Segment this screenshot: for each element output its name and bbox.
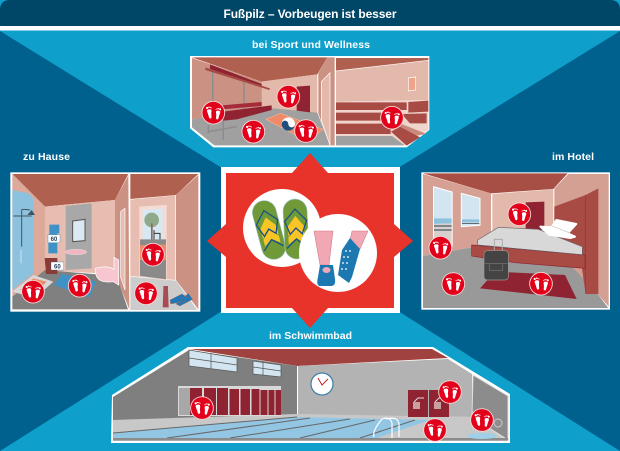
central panel: prevention <box>207 153 413 328</box>
heading: hotel: im Hotel <box>552 151 594 163</box>
panel: home <box>10 172 200 312</box>
laundry basket: 60 <box>54 264 61 270</box>
foot badges <box>190 380 494 442</box>
bath mat <box>54 274 96 297</box>
icon: flip flops <box>243 189 321 267</box>
towel <box>48 225 60 253</box>
header bar: Fußpilz – Vorbeugen ist besser <box>224 7 397 21</box>
foot badges <box>21 243 165 305</box>
foot badges <box>429 203 553 296</box>
panel: swimming pool <box>111 347 510 443</box>
suitcase <box>484 239 508 280</box>
panel: sport and wellness <box>190 56 429 147</box>
header bar <box>0 0 620 30</box>
bottle <box>163 286 169 307</box>
heading: home: zu Hause <box>23 151 70 163</box>
icon: grip socks <box>299 214 377 292</box>
pool ladder <box>374 418 399 438</box>
drain and puddle <box>467 419 502 439</box>
bed <box>472 220 585 268</box>
towel: 60 <box>51 237 58 243</box>
windows <box>189 350 281 377</box>
clock <box>311 373 333 395</box>
door with window <box>139 205 167 281</box>
lockers <box>178 386 281 416</box>
heading: pool: im Schwimmbad <box>269 330 352 342</box>
pool water <box>113 417 508 440</box>
heading: sport: bei Sport und Wellness <box>252 39 370 51</box>
mat with yin yang <box>266 113 323 142</box>
shoes <box>170 293 193 306</box>
sink <box>65 249 87 255</box>
showers <box>408 390 449 417</box>
left dark panel <box>0 31 222 451</box>
shower <box>12 190 53 298</box>
right dark panel <box>398 31 620 451</box>
panel: hotel <box>421 172 610 310</box>
coat rack bench <box>205 64 272 140</box>
toilet <box>95 257 119 285</box>
rug <box>480 272 577 299</box>
mirror <box>73 219 85 242</box>
laundry basket <box>45 258 64 274</box>
foot badges <box>202 85 404 143</box>
